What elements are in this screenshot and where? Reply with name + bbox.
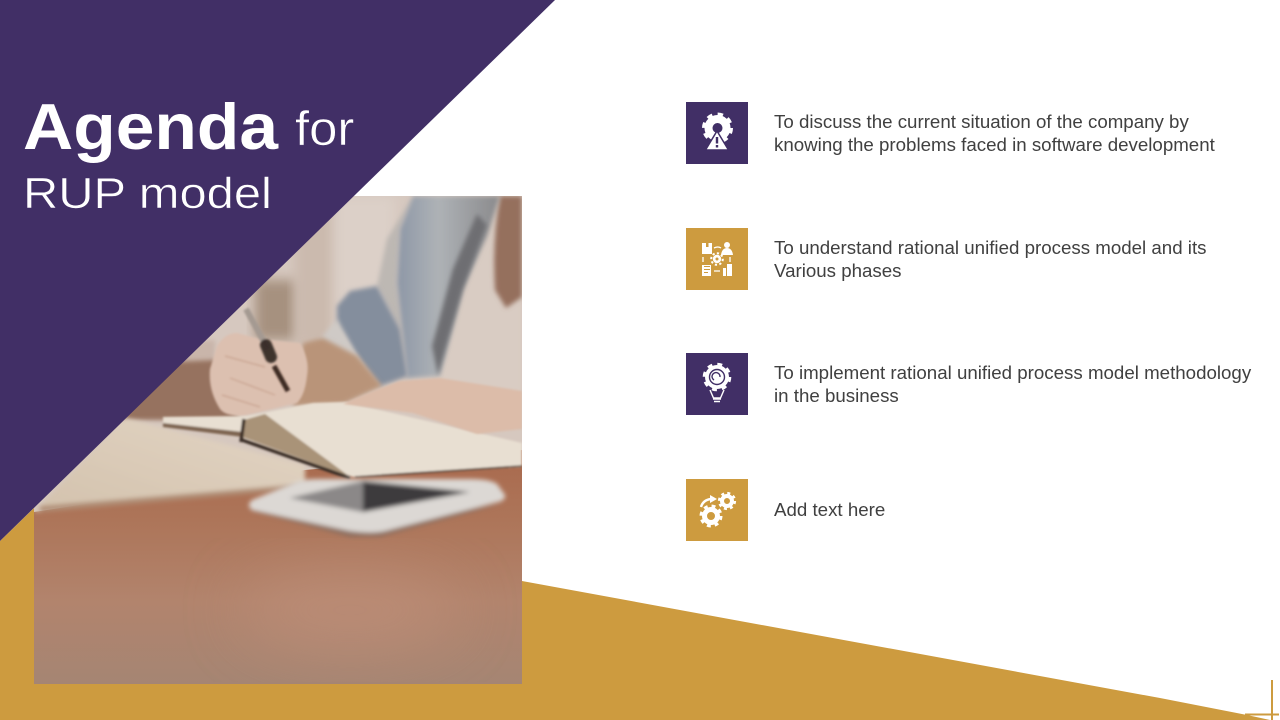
table (34, 450, 522, 684)
writing hand (210, 333, 308, 416)
agenda text 1 (774, 111, 1215, 155)
finger lines (222, 356, 275, 407)
agenda text 3: in the business (774, 385, 899, 406)
title word: for: for (295, 103, 354, 156)
open book (163, 402, 522, 478)
agenda text 1: knowing the problems faced in software development (774, 134, 1215, 155)
agenda text 3: To implement rational unified process model methodology (774, 362, 1251, 383)
resting hand (343, 378, 522, 434)
agenda text 4: Add text here (774, 499, 885, 520)
title word: Agenda: Agenda (23, 90, 278, 163)
agenda icon 2: process cycle (686, 228, 748, 290)
agenda text 3 (774, 362, 1252, 406)
notepad (34, 418, 305, 512)
agenda icon 3: light bulb with gear (686, 353, 748, 415)
wall (255, 280, 297, 340)
sleeve (337, 286, 408, 386)
photo: person writing in a notebook at a desk (34, 196, 522, 684)
agenda text 2 (774, 237, 1207, 281)
arm (293, 338, 382, 406)
agenda text 1: To discuss the current situation of the company by (774, 111, 1189, 132)
agenda icon 4: gears with arrow (686, 479, 748, 541)
background desk behind hand (110, 360, 240, 420)
shoulder (376, 210, 406, 325)
scarf (397, 196, 500, 378)
agenda icon 1: gear with warning triangle (686, 102, 748, 164)
title (23, 90, 354, 218)
title line: RUP model: RUP model (23, 169, 272, 218)
agenda text 2: To understand rational unified process model and its (774, 237, 1207, 258)
pen (246, 309, 288, 391)
neck (494, 196, 522, 308)
agenda text 2: Various phases (774, 260, 902, 281)
phone (248, 479, 505, 537)
shirt right (436, 196, 522, 395)
